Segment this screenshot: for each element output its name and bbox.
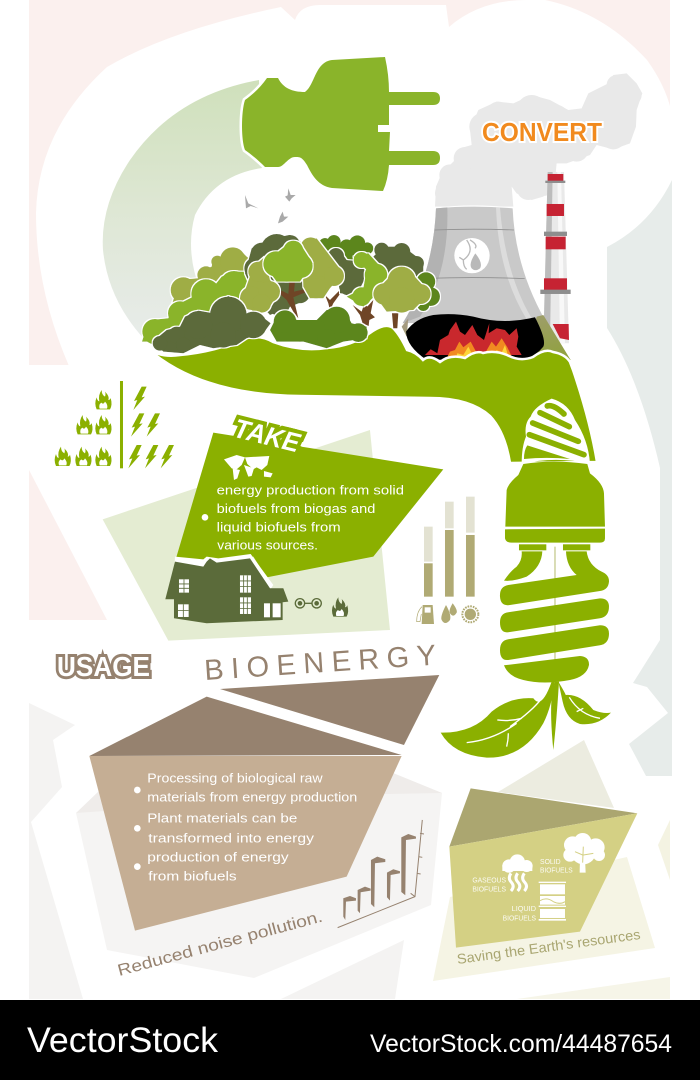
biofuel labels bbox=[472, 859, 573, 922]
biofuel labels: LIQUID bbox=[512, 906, 536, 913]
take text bbox=[217, 483, 404, 553]
icon: connector bbox=[295, 599, 321, 608]
icon: droplet emblem bbox=[454, 238, 490, 273]
icon: drops bbox=[441, 603, 457, 623]
icon: flame dark bbox=[332, 597, 348, 617]
panel: usage bbox=[89, 675, 439, 980]
bulb coil bbox=[553, 547, 556, 682]
furnace opening with fire bbox=[402, 314, 571, 360]
green swoosh behind plug bbox=[103, 80, 262, 340]
birds bbox=[245, 188, 296, 223]
biofuel labels: GASEOUS bbox=[472, 878, 506, 885]
icon: tree bbox=[563, 833, 605, 873]
usage text bbox=[147, 771, 357, 884]
panel front bbox=[449, 813, 637, 948]
caption: saving resources: Saving the Earth's resources bbox=[456, 926, 641, 967]
icon: house bbox=[165, 554, 288, 623]
heading: bioenergy: BIOENERGY bbox=[203, 640, 437, 687]
front bushes bbox=[153, 296, 271, 353]
3d bar chart bbox=[338, 820, 424, 928]
take text: biofuels from biogas and bbox=[217, 501, 375, 516]
bulb cap bbox=[505, 462, 605, 527]
bullet bbox=[202, 514, 208, 521]
bulb spiral top bbox=[522, 399, 590, 464]
panel: biofuels bbox=[449, 788, 641, 967]
panel front bbox=[89, 756, 402, 931]
icon: world map bbox=[224, 455, 273, 480]
panel dark roof bbox=[220, 675, 439, 745]
caption: reduced noise: Reduced noise pollution. bbox=[116, 908, 324, 980]
back bushes bbox=[168, 247, 251, 315]
panel roof bbox=[449, 788, 637, 847]
icon: smoke cloud bbox=[435, 73, 642, 207]
icon: flames bbox=[425, 322, 522, 360]
middle tree crowns bbox=[328, 248, 366, 295]
heading: take: TAKE bbox=[231, 413, 304, 459]
icon: power plug bbox=[242, 57, 440, 191]
icon: sun bbox=[462, 606, 478, 622]
usage text: transformed into energy bbox=[148, 830, 315, 845]
usage text: production of energy bbox=[147, 850, 289, 865]
footer url: VectorStock.com/44487654 bbox=[370, 1030, 672, 1058]
footer bar bbox=[0, 1000, 700, 1080]
tree trunks bbox=[280, 282, 398, 328]
biofuel labels: BIOFUELS bbox=[472, 887, 506, 894]
heading: usage: USAGE bbox=[57, 651, 150, 682]
panel green shape bbox=[176, 433, 443, 577]
take text: liquid biofuels from bbox=[217, 519, 341, 534]
icon: fuel pump bbox=[417, 605, 434, 624]
biofuel labels: SOLID bbox=[540, 859, 561, 866]
biofuel labels: BIOFUELS bbox=[503, 915, 536, 922]
icon: light bulb bbox=[441, 399, 611, 758]
take text: energy production from solid bbox=[217, 483, 404, 498]
bullets bbox=[134, 787, 141, 870]
fire and power icons bbox=[55, 381, 174, 468]
icon: barrel bbox=[539, 882, 566, 921]
panel backdrop bbox=[103, 430, 390, 641]
biofuel labels: BIOFUELS bbox=[540, 868, 573, 875]
heading: convert: CONVERT bbox=[482, 117, 602, 147]
main green swoosh bbox=[147, 326, 597, 463]
bar chart: energy sources bbox=[417, 497, 478, 624]
usage text: Processing of biological raw bbox=[147, 771, 323, 786]
icon: cloud with waves bbox=[502, 854, 533, 891]
leaves and root bbox=[441, 682, 555, 758]
usage text: Plant materials can be bbox=[147, 811, 297, 826]
take text: various sources. bbox=[217, 538, 318, 553]
usage text: from biofuels bbox=[148, 869, 237, 884]
panel: take bbox=[103, 413, 443, 641]
cooling tower bbox=[403, 205, 545, 323]
trees and bushes bbox=[142, 234, 440, 353]
factory chimney bbox=[540, 172, 571, 343]
footer brand: VectorStock bbox=[27, 1021, 219, 1060]
usage text: materials from energy production bbox=[147, 790, 357, 805]
